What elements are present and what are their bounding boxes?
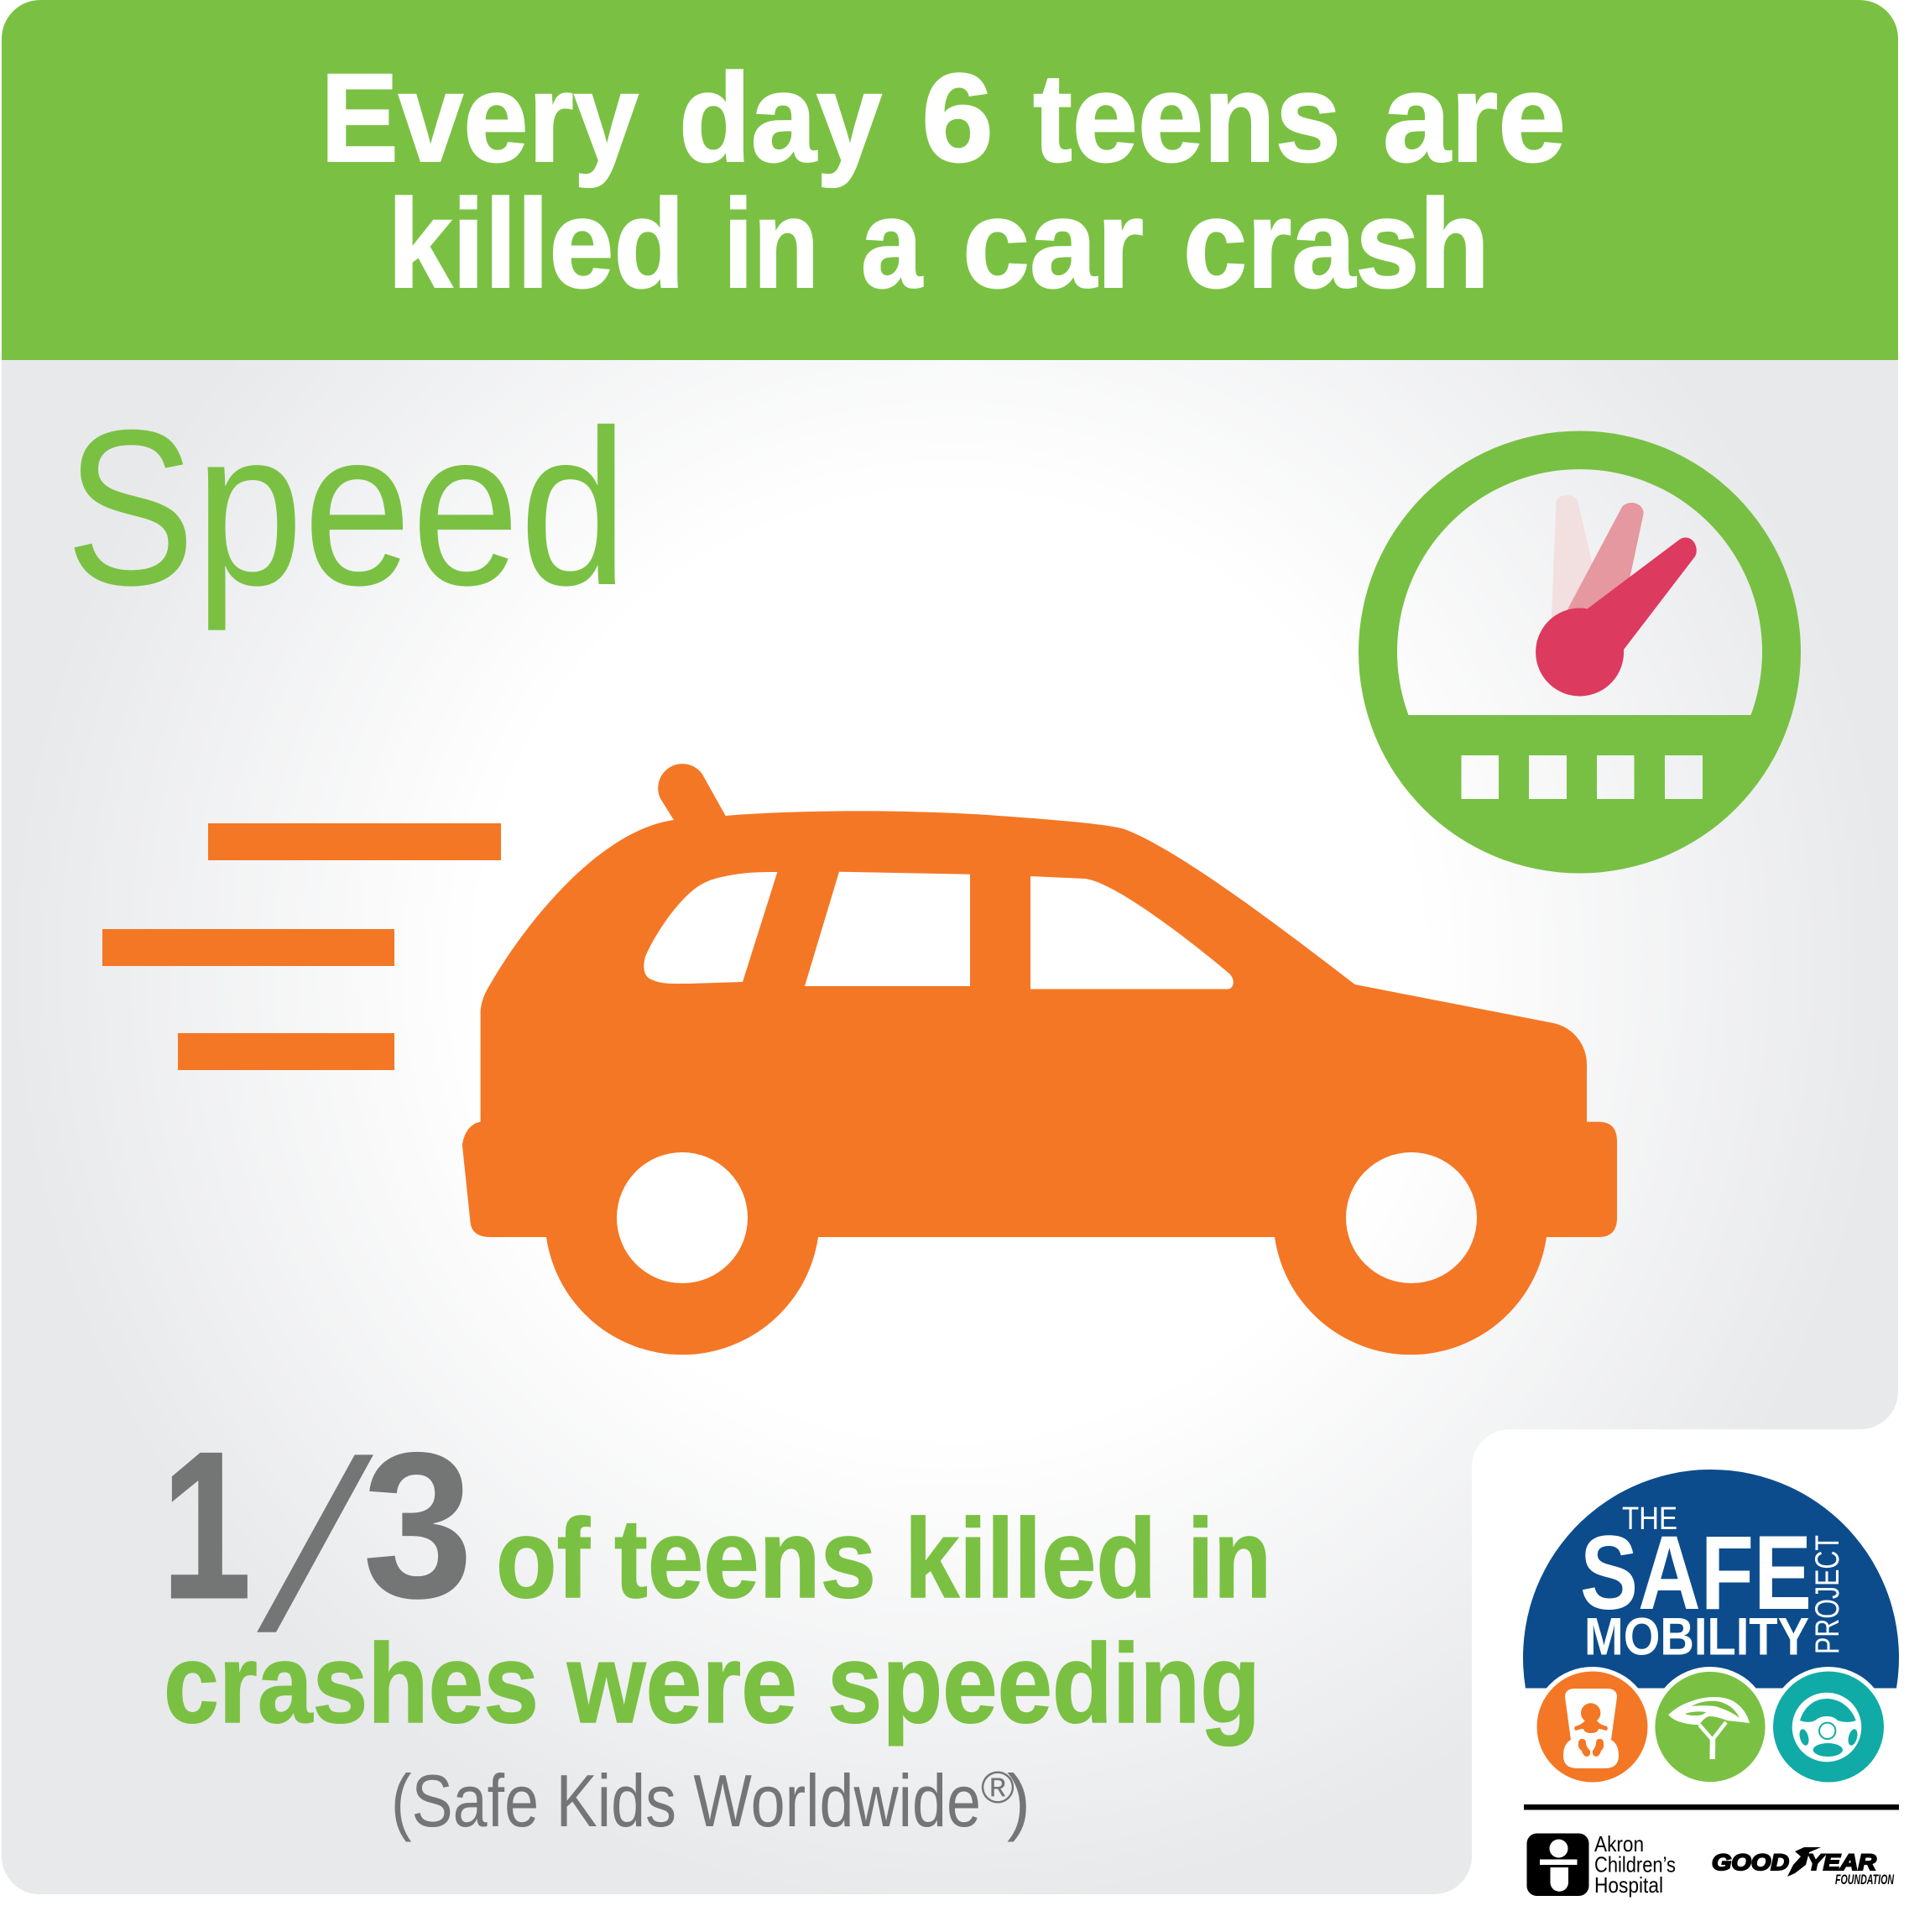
title: crash — [1183, 173, 1489, 314]
stat text: crashes — [164, 1621, 539, 1747]
icon: bicycle helmet — [1655, 1672, 1766, 1782]
icon: steering wheel — [1773, 1672, 1884, 1783]
logo: Goodyear Foundation: FOUNDATION — [1835, 1872, 1894, 1888]
logo: Goodyear Foundation: YEAR — [1807, 1850, 1877, 1875]
title: teens — [1033, 47, 1341, 188]
source credit: ® — [981, 1762, 1015, 1813]
source credit: (Safe Kids Worldwide — [391, 1759, 981, 1842]
stat text: were — [566, 1621, 797, 1747]
title: are — [1383, 47, 1566, 188]
title — [321, 47, 1566, 314]
Akron name: Children’s — [1594, 1851, 1676, 1877]
black divider rule — [1524, 1804, 1899, 1809]
logo wordmark: SAFE — [1580, 1515, 1812, 1632]
title: 6 — [921, 47, 994, 188]
panel: gray gradient background — [2, 360, 1898, 1894]
logo: Goodyear Foundation: GOOD — [1712, 1850, 1789, 1875]
Akron icon — [1527, 1833, 1589, 1896]
medium needle trail — [1566, 503, 1644, 613]
icon: orange car — [462, 764, 1617, 1355]
fraction 1/3: 3 — [363, 1408, 473, 1642]
stat text: in — [1187, 1496, 1271, 1621]
source credit: ) — [1007, 1759, 1030, 1842]
blue semicircle — [1523, 1470, 1899, 1689]
Akron name — [1594, 1831, 1676, 1898]
logo wordmark: THE — [1622, 1501, 1677, 1537]
fraction 1/3: 1 — [162, 1408, 251, 1642]
panel: green header banner — [2, 0, 1898, 360]
icon: speed lines — [102, 823, 501, 1070]
faint needle trail — [1552, 495, 1603, 621]
stat text: teens — [614, 1496, 876, 1621]
title: a — [861, 173, 923, 314]
title: day — [679, 47, 882, 188]
logo: The Safe Mobility Project — [1523, 1470, 1899, 1809]
fraction 1/3 — [162, 1408, 473, 1682]
logo wordmark: PROJECT — [1809, 1535, 1846, 1654]
logo wordmark — [1580, 1501, 1846, 1667]
white rings behind circles — [1532, 1667, 1888, 1787]
title: car — [962, 173, 1144, 314]
title: killed — [388, 173, 685, 314]
stat: one third of teens killed in crashes were speeding — [162, 1408, 1271, 1747]
logo: Akron Children's Hospital — [1527, 1831, 1676, 1898]
icon: winged foot — [1787, 1847, 1821, 1877]
gauge ring with display slots — [1359, 431, 1801, 873]
stat text: killed — [905, 1496, 1156, 1621]
title: in — [723, 173, 819, 314]
icon: child car seat — [1537, 1672, 1648, 1783]
logo: Goodyear Foundation — [1712, 1847, 1894, 1888]
title: Every — [321, 47, 639, 188]
Akron name: Hospital — [1594, 1872, 1663, 1898]
heading: Speed: Speed — [65, 384, 628, 633]
logo wordmark: MOBILITY — [1584, 1608, 1809, 1667]
stat text: of — [496, 1496, 590, 1621]
fraction 1/3: / — [243, 1412, 386, 1682]
stat text — [164, 1496, 1271, 1747]
Akron name: Akron — [1594, 1831, 1644, 1856]
stat text: speeding — [827, 1621, 1260, 1747]
icon: speedometer — [1359, 431, 1801, 873]
red needle — [1536, 537, 1697, 696]
